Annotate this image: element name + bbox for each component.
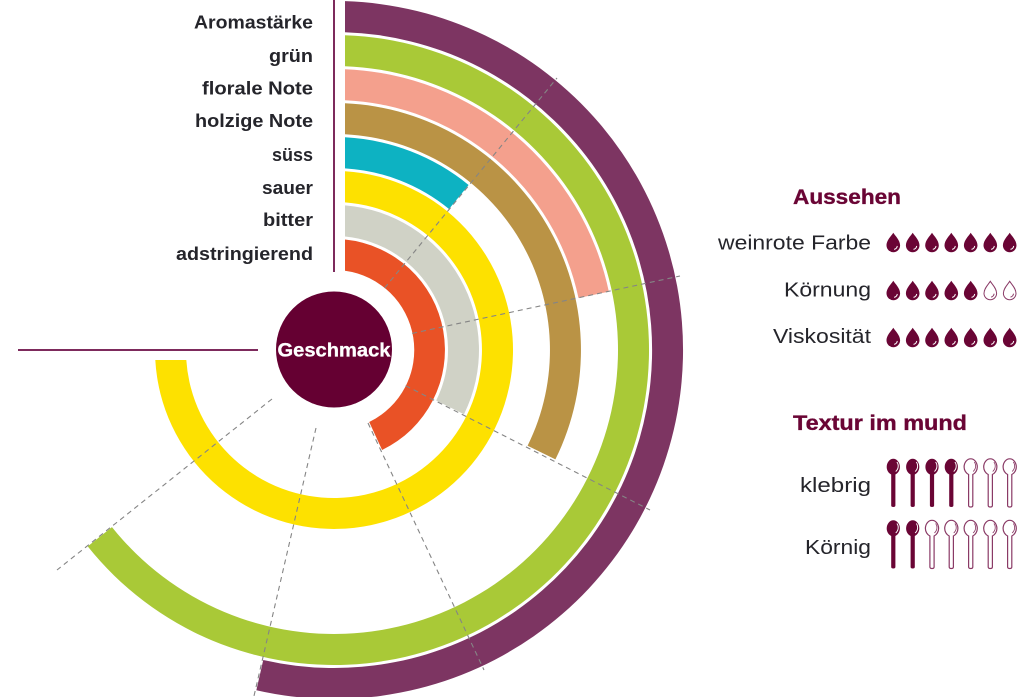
ring labels: sauer [262,178,313,198]
axis lines [18,0,334,350]
ring: Aromastärke [256,1,683,697]
center circle: Geschmack [276,292,392,408]
ring: adstringierend [345,240,445,450]
ring: holzige Note [345,103,581,459]
label: Viskosität: Viskosität [773,326,871,348]
ring labels: grün [269,46,313,66]
spoons: klebrig 4 of 7 [887,459,1016,507]
label: klebrig: klebrig [800,475,871,497]
ring: süss [345,137,469,209]
heading: Aussehen: Aussehen [793,186,901,209]
ring labels: Aromastärke [194,12,313,32]
ring: bitter [345,205,479,414]
center circle: Geschmack: Geschmack [278,340,391,362]
dashed radial spokes [57,78,680,696]
spoons: Körnig 2 of 7 [887,520,1016,568]
heading: Textur im mund: Textur im mund [793,412,967,435]
ring labels: süss [272,145,313,165]
ring labels [176,12,313,264]
ring: sauer [155,171,513,529]
label: weinrote Farbe: weinrote Farbe [717,232,871,254]
radial chart: taste rings [88,1,683,697]
ring labels: adstringierend [176,244,313,264]
ring: grün [88,35,649,665]
label: Körnig: Körnig [805,537,871,559]
drops: Körnung 5 of 7 [886,281,1016,300]
drops: Viskosität 7 of 7 [886,328,1016,347]
ring labels: holzige Note [195,111,313,131]
label: Körnung: Körnung [784,280,871,302]
ring labels: florale Note [202,78,313,98]
ring labels: bitter [263,210,313,230]
ring: florale Note [345,69,609,298]
drops: weinrote Farbe 7 of 7 [886,233,1016,252]
